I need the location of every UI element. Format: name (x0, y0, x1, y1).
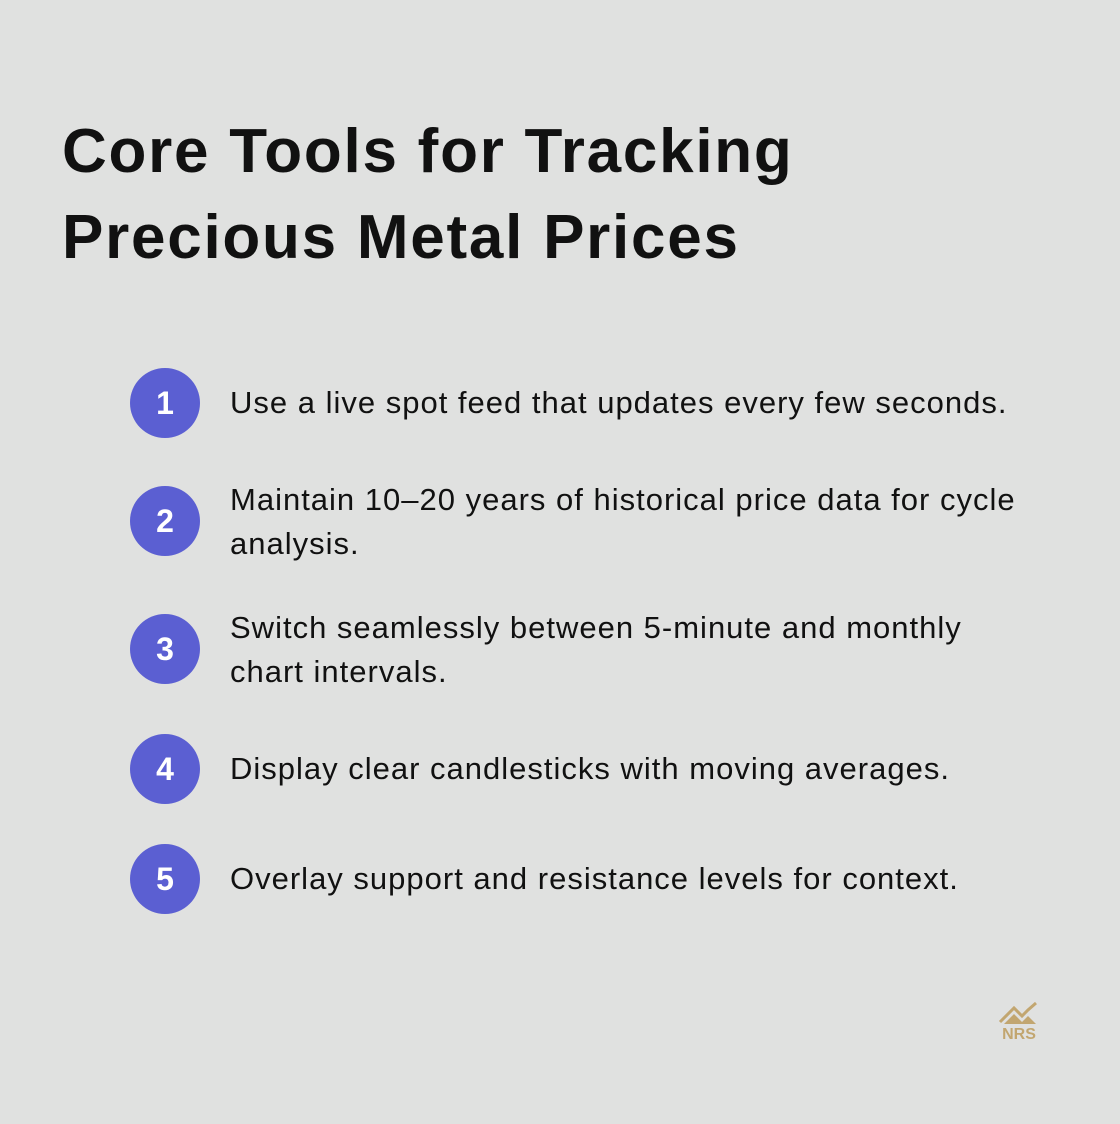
title: Core Tools for Tracking (62, 117, 794, 186)
title: Precious Metal Prices (62, 203, 740, 272)
title (62, 117, 794, 272)
badge 4: 4 (156, 751, 174, 787)
item 5 (130, 844, 959, 914)
text 5: Overlay support and resistance levels for context. (230, 861, 959, 896)
badge 4 (130, 734, 200, 804)
badge 2 (130, 486, 200, 556)
badge 3: 3 (156, 631, 174, 667)
badge 5: 5 (156, 861, 174, 897)
logo (999, 1002, 1037, 1042)
text 1: Use a live spot feed that updates every few seconds. (230, 385, 1007, 420)
text 4: Display clear candlesticks with moving averages. (230, 751, 950, 786)
item 4 (130, 734, 950, 804)
badge 1: 1 (156, 385, 174, 421)
item 3 (130, 610, 962, 689)
badge 3 (130, 614, 200, 684)
badge 5 (130, 844, 200, 914)
item 1 (130, 368, 1007, 438)
text 2: Maintain 10–20 years of historical price data for cycle analysis. (230, 482, 1016, 561)
item 2 (130, 482, 1016, 561)
text 3: Switch seamlessly between 5-minute and monthly chart intervals. (230, 610, 962, 689)
badge 2: 2 (156, 503, 174, 539)
badge 1 (130, 368, 200, 438)
